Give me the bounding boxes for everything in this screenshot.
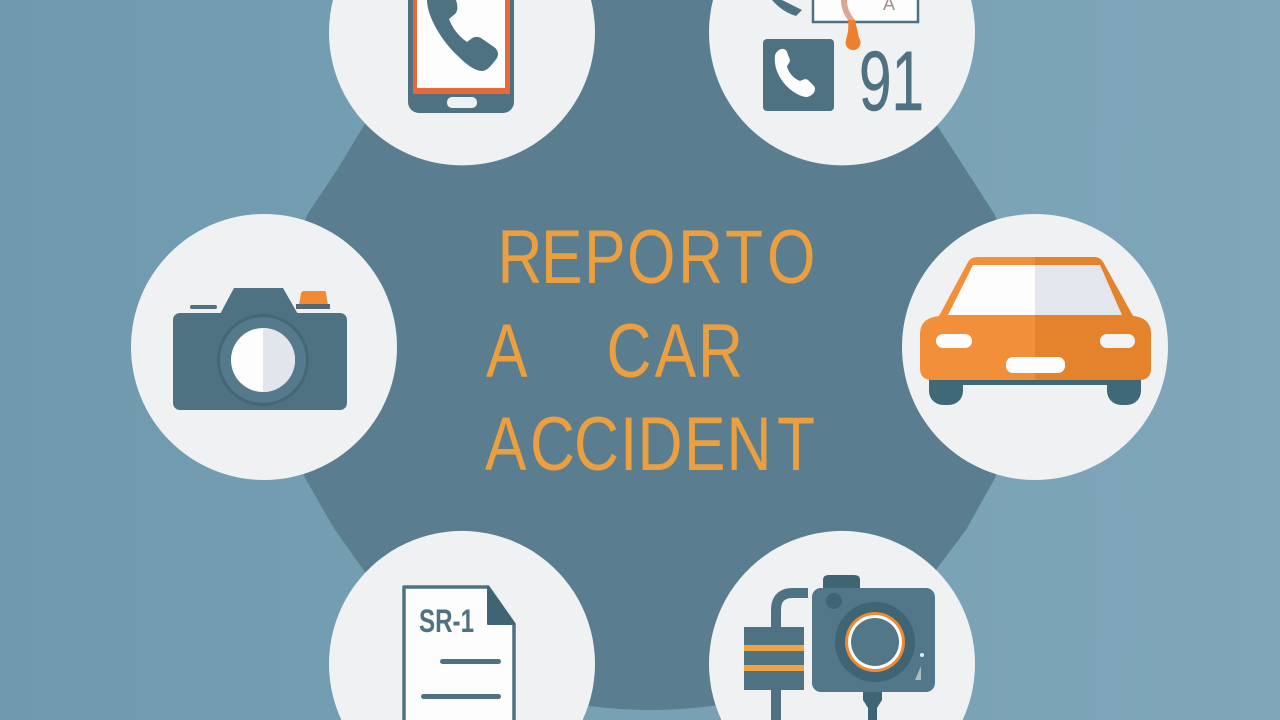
number: 91 bbox=[859, 34, 924, 128]
title: REPORTO bbox=[497, 214, 816, 299]
icon: camera with cable bbox=[812, 575, 935, 720]
step: phone call bbox=[329, 0, 595, 165]
step: SR-1 form bbox=[329, 531, 595, 720]
icon: smartphone bbox=[408, 0, 514, 113]
icon: phone tile bbox=[763, 39, 834, 111]
title bbox=[485, 214, 816, 486]
icon: sign card bbox=[813, 0, 918, 22]
icon: document: SR-1 bbox=[419, 603, 474, 639]
step: move the car bbox=[902, 214, 1168, 480]
step: photograph scene bbox=[131, 214, 397, 480]
icon: orange pin bbox=[841, 0, 861, 50]
icon: document bbox=[404, 587, 514, 720]
title: ACCIDENT bbox=[485, 401, 815, 486]
title: A bbox=[486, 308, 528, 393]
title: CAR bbox=[606, 308, 743, 393]
step: lock and camera bbox=[709, 531, 975, 720]
icon: car bbox=[920, 257, 1151, 405]
step: call 911 bbox=[709, 0, 975, 165]
icon: handset fragment bbox=[772, 0, 802, 16]
icon: padlock bbox=[744, 593, 808, 720]
icon: camera bbox=[173, 288, 347, 410]
central dark panel bbox=[295, 0, 1005, 710]
